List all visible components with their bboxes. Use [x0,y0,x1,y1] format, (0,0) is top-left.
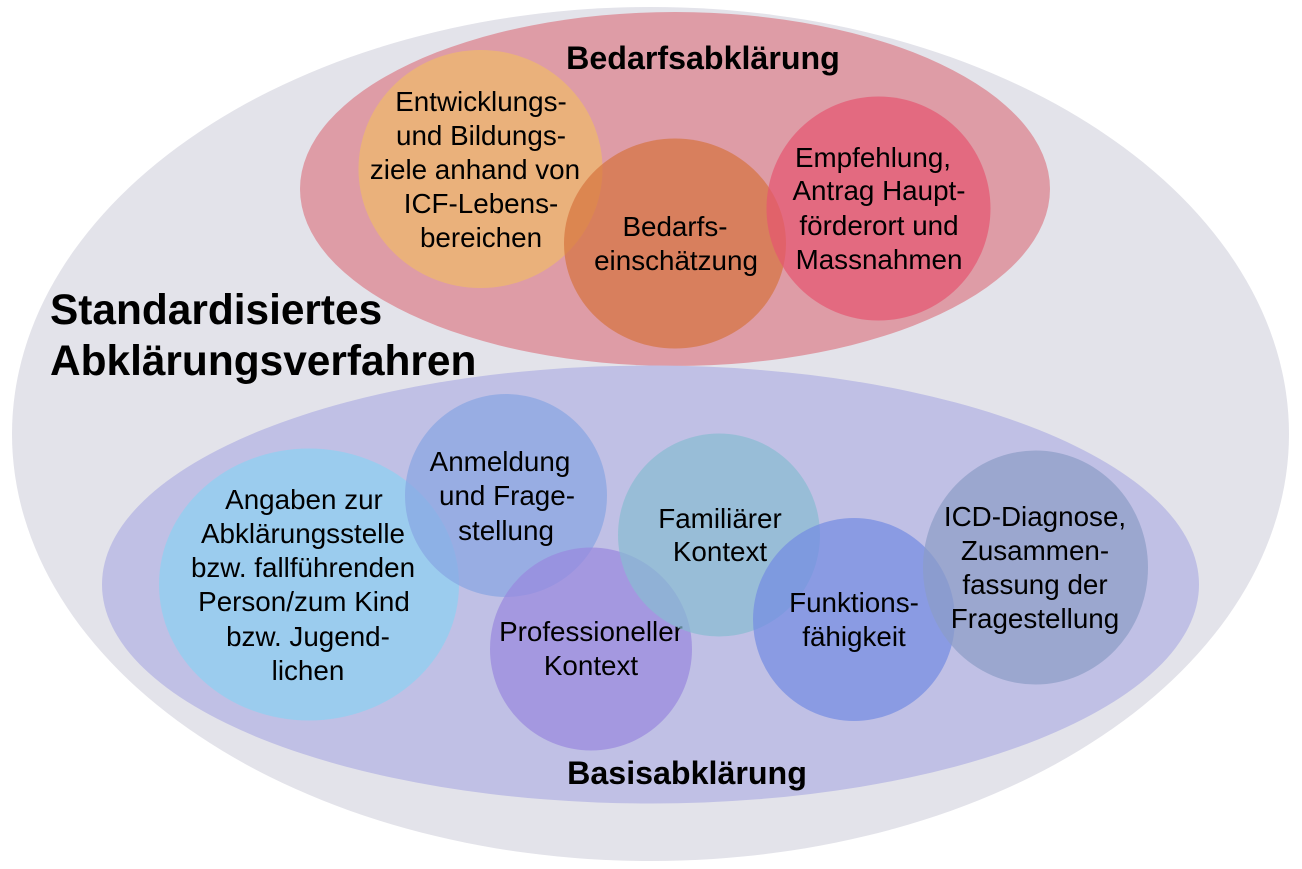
circle: Empfehlung, Antrag: förderort und [799,210,959,241]
circle: Professioneller Kontext: Professioneller [499,616,683,647]
heading: Bedarfsabklärung: Bedarfsabklärung [566,40,840,76]
circle: Funktionsfähigkeit: fähigkeit [802,621,906,652]
circle: Professioneller Kontext: Kontext [544,650,638,681]
circle: Angaben zur Abklärungsstelle: lichen [272,655,344,686]
circle: Familiärer Kontext [618,434,820,636]
heading: Basisabklärung: Basisabklärung [567,755,807,791]
circle: Professioneller Kontext [490,548,692,750]
circle: Angaben zur Abklärungsstelle [159,448,459,720]
circle: Familiärer Kontext: Kontext [673,536,767,567]
title [50,286,476,384]
circle: Entwicklungs- und Bildungsziele: Entwicklungs- [395,86,567,117]
circle: ICD-Diagnose: ICD-Diagnose, [944,501,1126,532]
circle: ICD-Diagnose: fassung der [962,569,1108,600]
panel: Bedarfsabklärung [300,12,1050,366]
circle: Angaben zur Abklärungsstelle: Person/zum Kind [198,586,410,617]
circle: Familiärer Kontext: Familiärer [658,503,782,534]
circle: Anmeldung und Fragestellung [405,394,607,597]
circle: Angaben zur Abklärungsstelle: Abklärungsstelle [201,518,405,549]
circle: Angaben zur Abklärungsstelle: bzw. fallführenden [191,552,415,583]
circle: Angaben zur Abklärungsstelle: Angaben zur [225,484,383,515]
circle: ICD-Diagnose [923,450,1148,684]
circle: Entwicklungs- und Bildungsziele: ICF-Lebens- [404,188,558,219]
title: Standardisiertes [50,286,382,333]
circle: Empfehlung, Antrag: Antrag Haupt- [792,175,966,206]
circle: Angaben zur Abklärungsstelle: bzw. Jugend- [226,621,390,652]
circle: Anmeldung und Fragestellung: Anmeldung [430,446,570,477]
circle: Anmeldung und Fragestellung: stellung [458,515,554,546]
circle: Bedarfseinschätzung: Bedarfs- [622,211,728,242]
circle: Entwicklungs- und Bildungsziele: bereichen [420,222,542,253]
circle: Empfehlung, Antrag: Massnahmen [796,244,962,275]
circle: Entwicklungs- und Bildungsziele: und Bildungs- [396,120,566,151]
circle: Bedarfseinschätzung: einschätzung [594,245,758,276]
circle: Empfehlung, Antrag: Empfehlung, [795,142,951,173]
circle: Entwicklungs- und Bildungsziele [358,50,602,288]
circle: Funktionsfähigkeit [753,518,955,721]
title: Abklärungsverfahren [50,337,476,384]
circle: Empfehlung, Antrag [766,96,990,320]
circle: Entwicklungs- und Bildungsziele: ziele anhand von [370,154,580,185]
panel: Basisabklärung [102,366,1199,804]
circle: Anmeldung und Fragestellung: und Frage- [439,480,575,511]
circle: Bedarfseinschätzung [564,138,786,348]
circle: ICD-Diagnose: Zusammen- [961,535,1109,566]
circle: ICD-Diagnose: Fragestellung [951,603,1119,634]
circle: Funktionsfähigkeit: Funktions- [789,587,919,618]
